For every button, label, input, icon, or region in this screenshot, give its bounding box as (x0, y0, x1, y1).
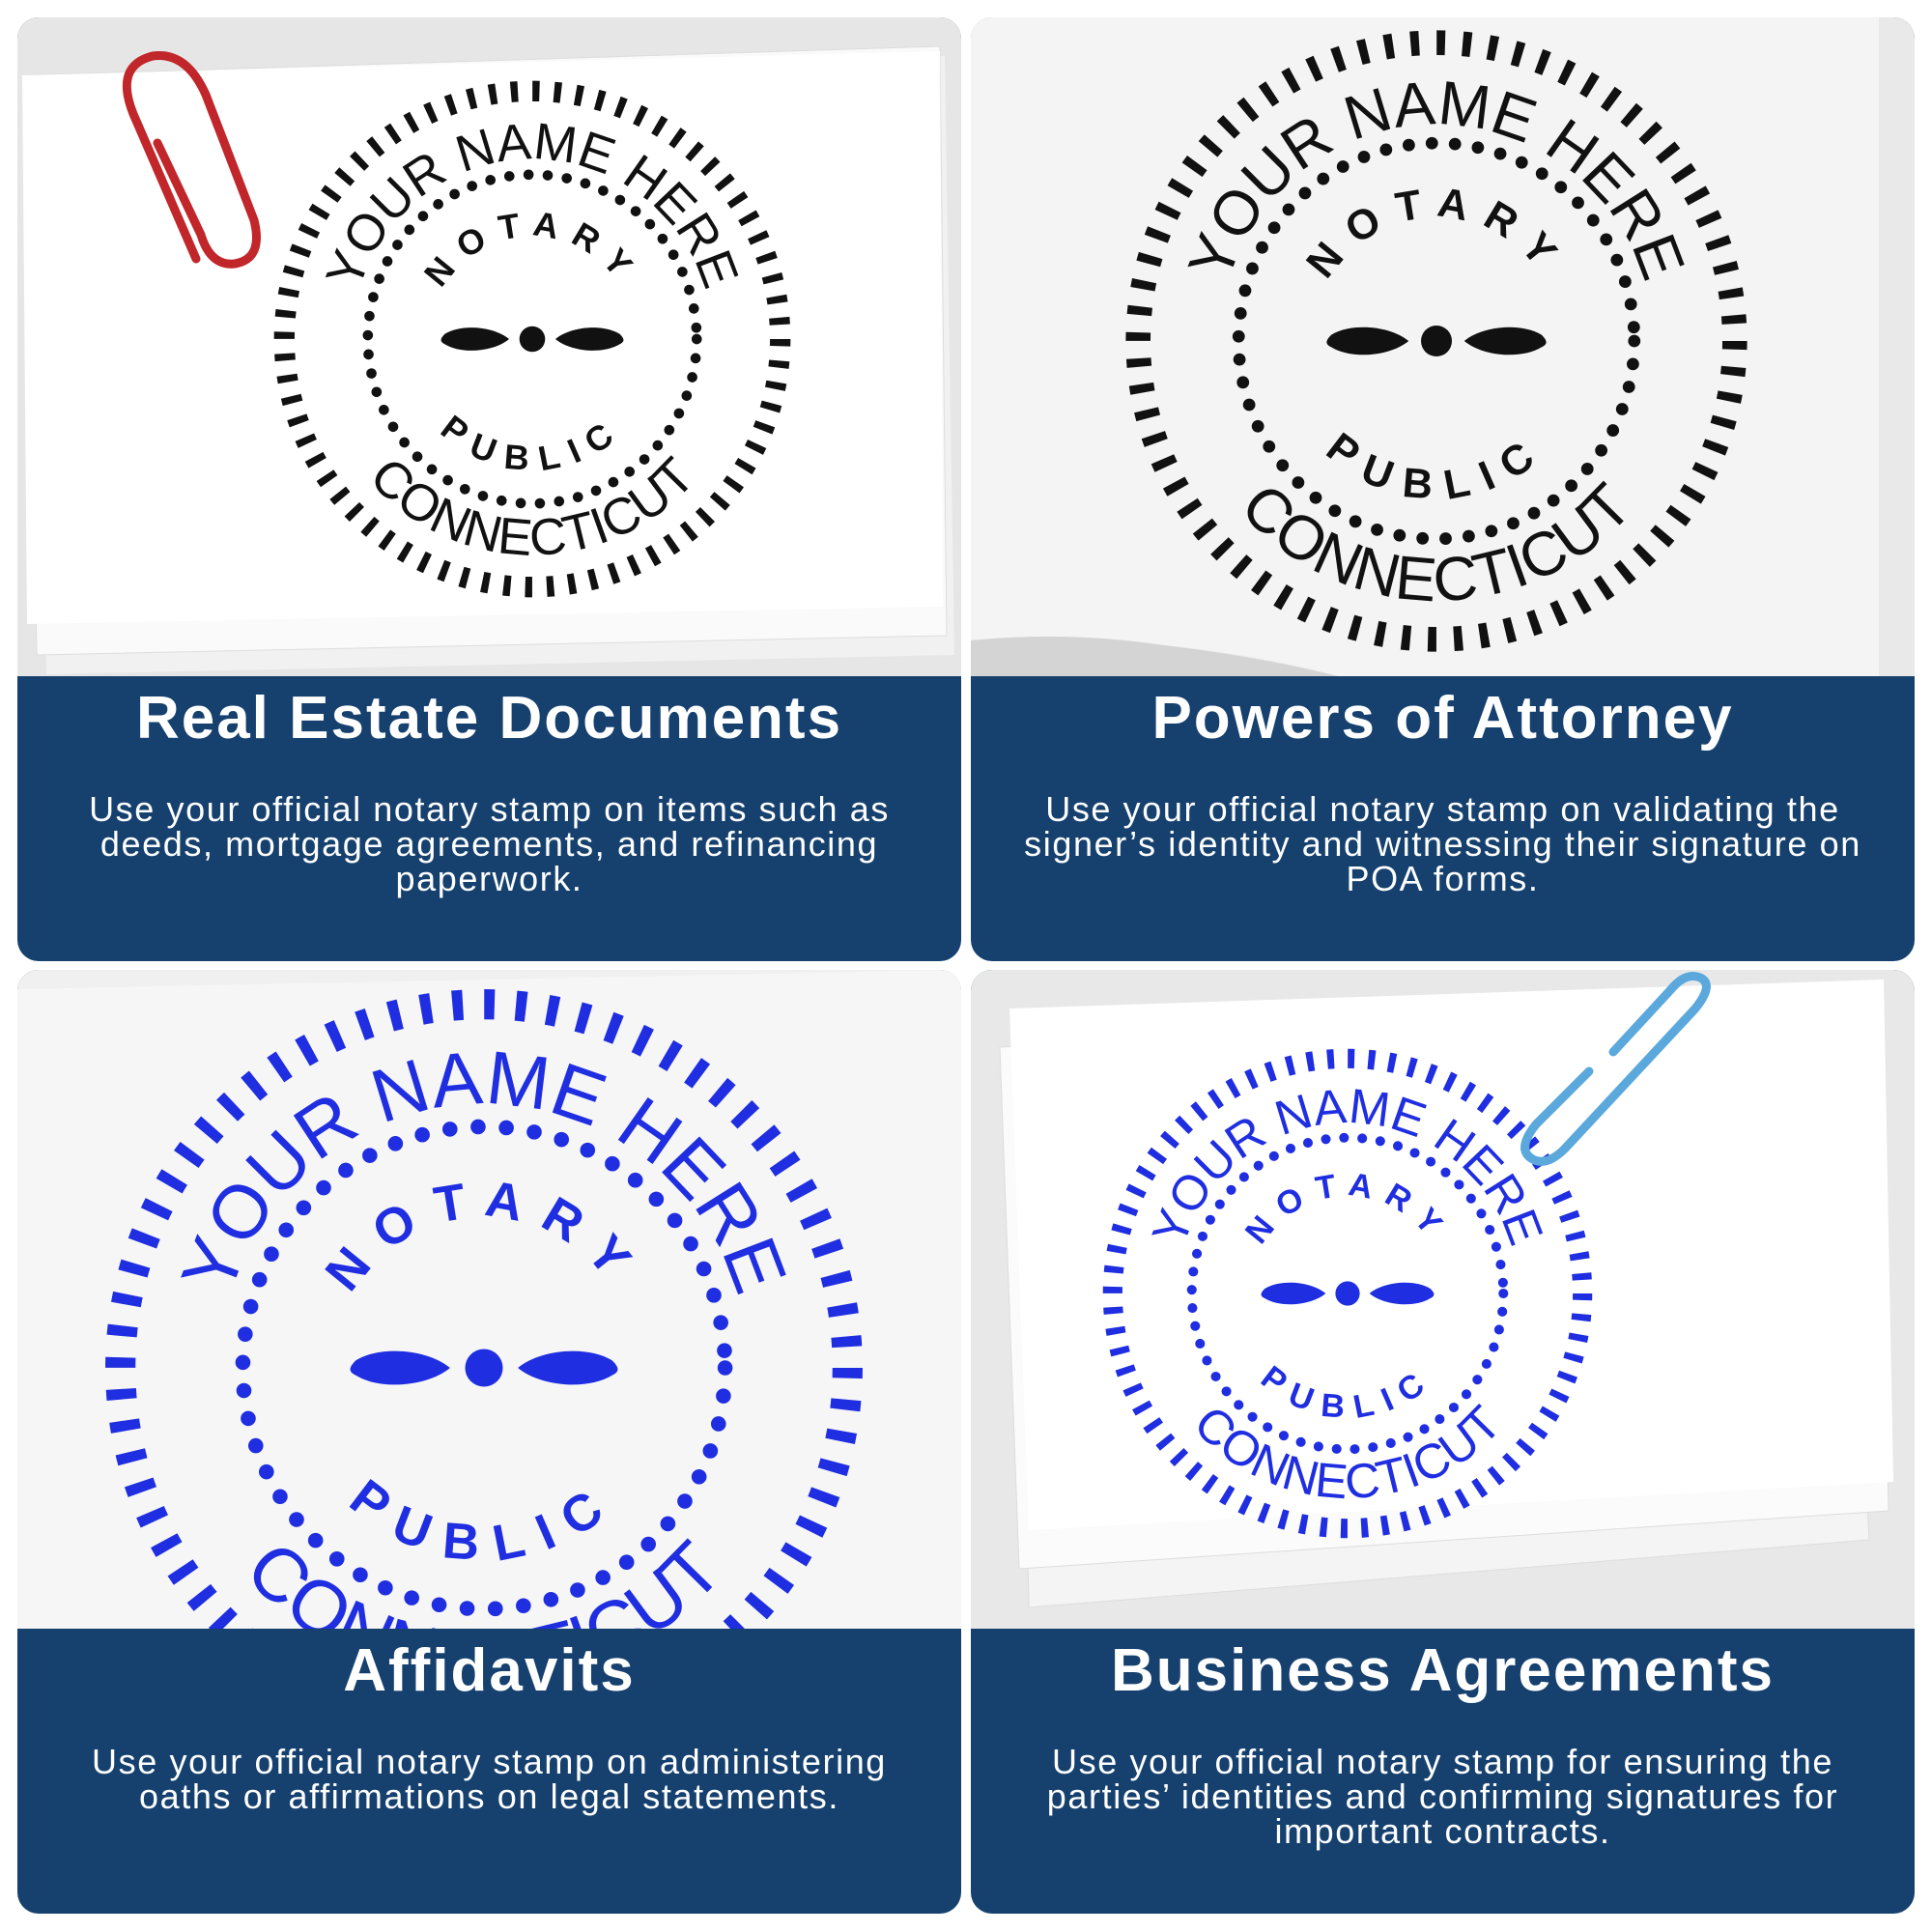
caption: business agreements (1047, 1637, 1838, 1851)
photo: blue stamp on cards with blue paperclip: YOUR NAME HERE (1151, 1089, 1544, 1246)
photo: black stamp on torn paper: CONNECTICUT (1248, 481, 1624, 601)
photo: black stamp on torn paper (971, 17, 1915, 676)
photo: black stamp on card with red paperclip: CONNECTICUT (375, 455, 688, 555)
photo: blue stamp on cards with blue paperclip (971, 970, 1915, 1629)
caption: affidavits: Use your official notary stamp on administering (92, 1742, 887, 1781)
caption: real estate: Real Estate Documents (136, 685, 842, 752)
caption: affidavits: Affidavits (343, 1637, 636, 1704)
photo: large blue stamp (17, 970, 961, 1629)
caption: affidavits (92, 1637, 887, 1816)
photo: black stamp on torn paper: YOUR NAME HERE (1188, 81, 1685, 281)
photo: blue stamp on cards with blue paperclip: PUBLIC (1261, 1365, 1423, 1418)
photo: large blue stamp: PUBLIC (350, 1479, 601, 1561)
caption: real estate: paperwork. (395, 859, 583, 898)
photo: black stamp on card with red paperclip (17, 17, 961, 676)
photo: blue stamp on cards with blue paperclip: NOTARY (1244, 1174, 1444, 1244)
photo: black stamp on card with red paperclip: NOTARY (423, 213, 634, 287)
caption: powers of attorney: Use your official notary stamp on validating the (1045, 789, 1840, 829)
caption: powers of attorney (1024, 685, 1861, 898)
photo: black stamp on card with red paperclip: PUBLIC (440, 415, 611, 470)
caption: business agreements: parties’ identities and confirming signatures for (1047, 1776, 1838, 1816)
caption: real estate: deeds, mortgage agreements, and refinancing (100, 824, 878, 864)
panel: business agreements (971, 970, 1915, 1914)
photo: blue stamp on cards with blue paperclip: CONNECTICUT (1199, 1404, 1495, 1499)
photo: black stamp on torn paper: NOTARY (1306, 189, 1559, 278)
icon: blue paperclip (1525, 976, 1706, 1161)
caption: real estate (89, 685, 890, 898)
caption: real estate: Use your official notary stamp on items such as (89, 789, 890, 829)
photo: black stamp on card with red paperclip: YOUR NAME HERE (325, 124, 738, 290)
icon: red paperclip (127, 56, 257, 264)
panel: real estate documents (17, 17, 961, 961)
panel: affidavits (17, 970, 961, 1914)
caption: business agreements: Use your official notary stamp for ensuring the (1052, 1742, 1833, 1781)
caption: powers of attorney: signer’s identity and witnessing their signature on (1024, 824, 1861, 864)
panel: powers of attorney (971, 17, 1915, 961)
caption: business agreements: important contracts. (1274, 1811, 1611, 1851)
caption: business agreements: Business Agreements (1111, 1637, 1775, 1704)
caption: powers of attorney: Powers of Attorney (1151, 685, 1734, 752)
caption: affidavits: oaths or affirmations on legal statements. (139, 1776, 839, 1816)
photo: large blue stamp: NOTARY (325, 1182, 634, 1292)
caption: powers of attorney: POA forms. (1346, 859, 1540, 898)
photo: large blue stamp: YOUR NAME HERE (181, 1051, 786, 1294)
photo: black stamp on torn paper: PUBLIC (1325, 433, 1532, 499)
